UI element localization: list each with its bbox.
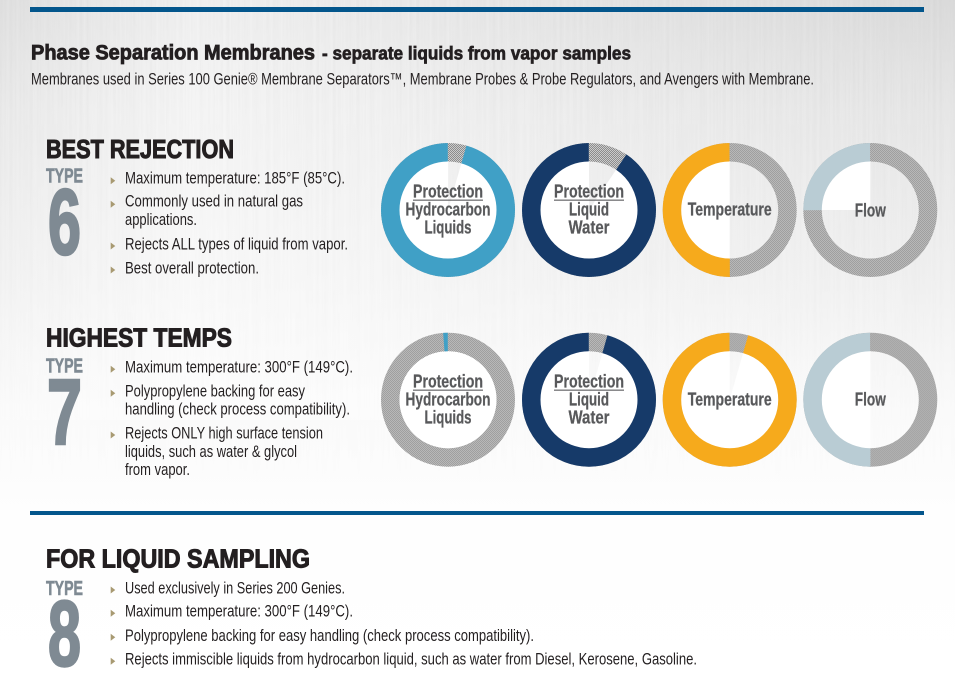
bullet list	[111, 359, 353, 479]
donut: type 7 water protection	[531, 342, 647, 457]
title suffix: - separate liquids from vapor samples	[322, 42, 631, 64]
bullet list: Maximum temperature: 185°F (85°C).	[125, 169, 345, 187]
bullet list: applications.	[125, 211, 197, 229]
title block	[31, 40, 814, 88]
donut: type 7 hydrocarbon protection: Hydrocarbon	[406, 388, 490, 409]
panel: type 8 liquid sampling	[46, 546, 697, 682]
donut: type 7 flow	[813, 342, 928, 457]
panel: type 6 best rejection	[46, 136, 348, 277]
donut: type 6 water protection: Water	[568, 216, 610, 237]
top rule	[30, 7, 924, 12]
type label: TYPE	[46, 578, 83, 600]
donut: type 6 temperature	[672, 152, 787, 268]
bullet list	[111, 169, 348, 277]
bullet list: Polypropylene backing for easy handling (check process compatibility).	[125, 627, 534, 645]
heading: FOR LIQUID SAMPLING	[46, 546, 310, 574]
bullet list: from vapor.	[125, 461, 190, 479]
donut: type 7 flow: Flow	[855, 388, 886, 409]
bullet list	[111, 580, 697, 668]
type label: TYPE	[46, 355, 83, 377]
bullet list: Used exclusively in Series 200 Genies.	[125, 580, 345, 598]
type number: 6	[48, 170, 81, 274]
donut: type 7 water protection: Liquid	[569, 388, 609, 409]
donut: type 7 water protection: Water	[568, 406, 610, 427]
donut: type 7 hydrocarbon protection	[390, 342, 506, 457]
bullet list: liquids, such as water & glycol	[125, 443, 297, 461]
donut: type 7 hydrocarbon protection: Liquids	[424, 406, 472, 427]
donut: type 7 temperature	[672, 342, 787, 457]
heading: BEST REJECTION	[46, 136, 234, 164]
bullet list: Maximum temperature: 300°F (149°C).	[125, 603, 353, 621]
bullet list: Rejects ALL types of liquid from vapor.	[125, 235, 348, 253]
type label: TYPE	[46, 166, 83, 188]
donut: type 6 water protection: Protection	[554, 181, 624, 202]
bullet list: Polypropylene backing for easy	[125, 383, 306, 401]
bullet list: Maximum temperature: 300°F (149°C).	[125, 359, 353, 377]
donut: type 6 hydrocarbon protection: Protection	[413, 181, 483, 202]
donut: type 6 water protection	[531, 152, 647, 268]
type number: 7	[47, 360, 82, 464]
donut: type 7 hydrocarbon protection: Protection	[413, 371, 483, 392]
donut: type 7 temperature: Temperature	[688, 388, 772, 409]
donut: type 6 flow: Flow	[855, 199, 886, 220]
bullet list: Rejects ONLY high surface tension	[125, 424, 323, 442]
bullet list: Best overall protection.	[125, 259, 259, 277]
donut: type 6 temperature: Temperature	[688, 198, 772, 219]
donut: type 6 hydrocarbon protection	[390, 152, 506, 268]
panel: type 7 highest temps	[46, 324, 353, 479]
donut: type 7 water protection: Protection	[554, 371, 624, 392]
bullet list: handling (check process compatibility).	[125, 400, 350, 418]
donut: type 6 water protection: Liquid	[569, 198, 609, 219]
bullet list: Rejects immiscible liquids from hydrocarbon liquid, such as water from Diesel, Kerosene, Gasoline.	[125, 650, 697, 668]
donut: type 6 hydrocarbon protection: Liquids	[424, 216, 472, 237]
bullet list: Commonly used in natural gas	[125, 193, 303, 211]
donut: type 6 flow	[813, 152, 928, 268]
title: Phase Separation Membranes	[31, 40, 315, 64]
donut: type 6 hydrocarbon protection: Hydrocarbon	[406, 198, 490, 219]
section rule	[30, 511, 924, 515]
heading: HIGHEST TEMPS	[46, 324, 232, 352]
background	[0, 0, 955, 394]
